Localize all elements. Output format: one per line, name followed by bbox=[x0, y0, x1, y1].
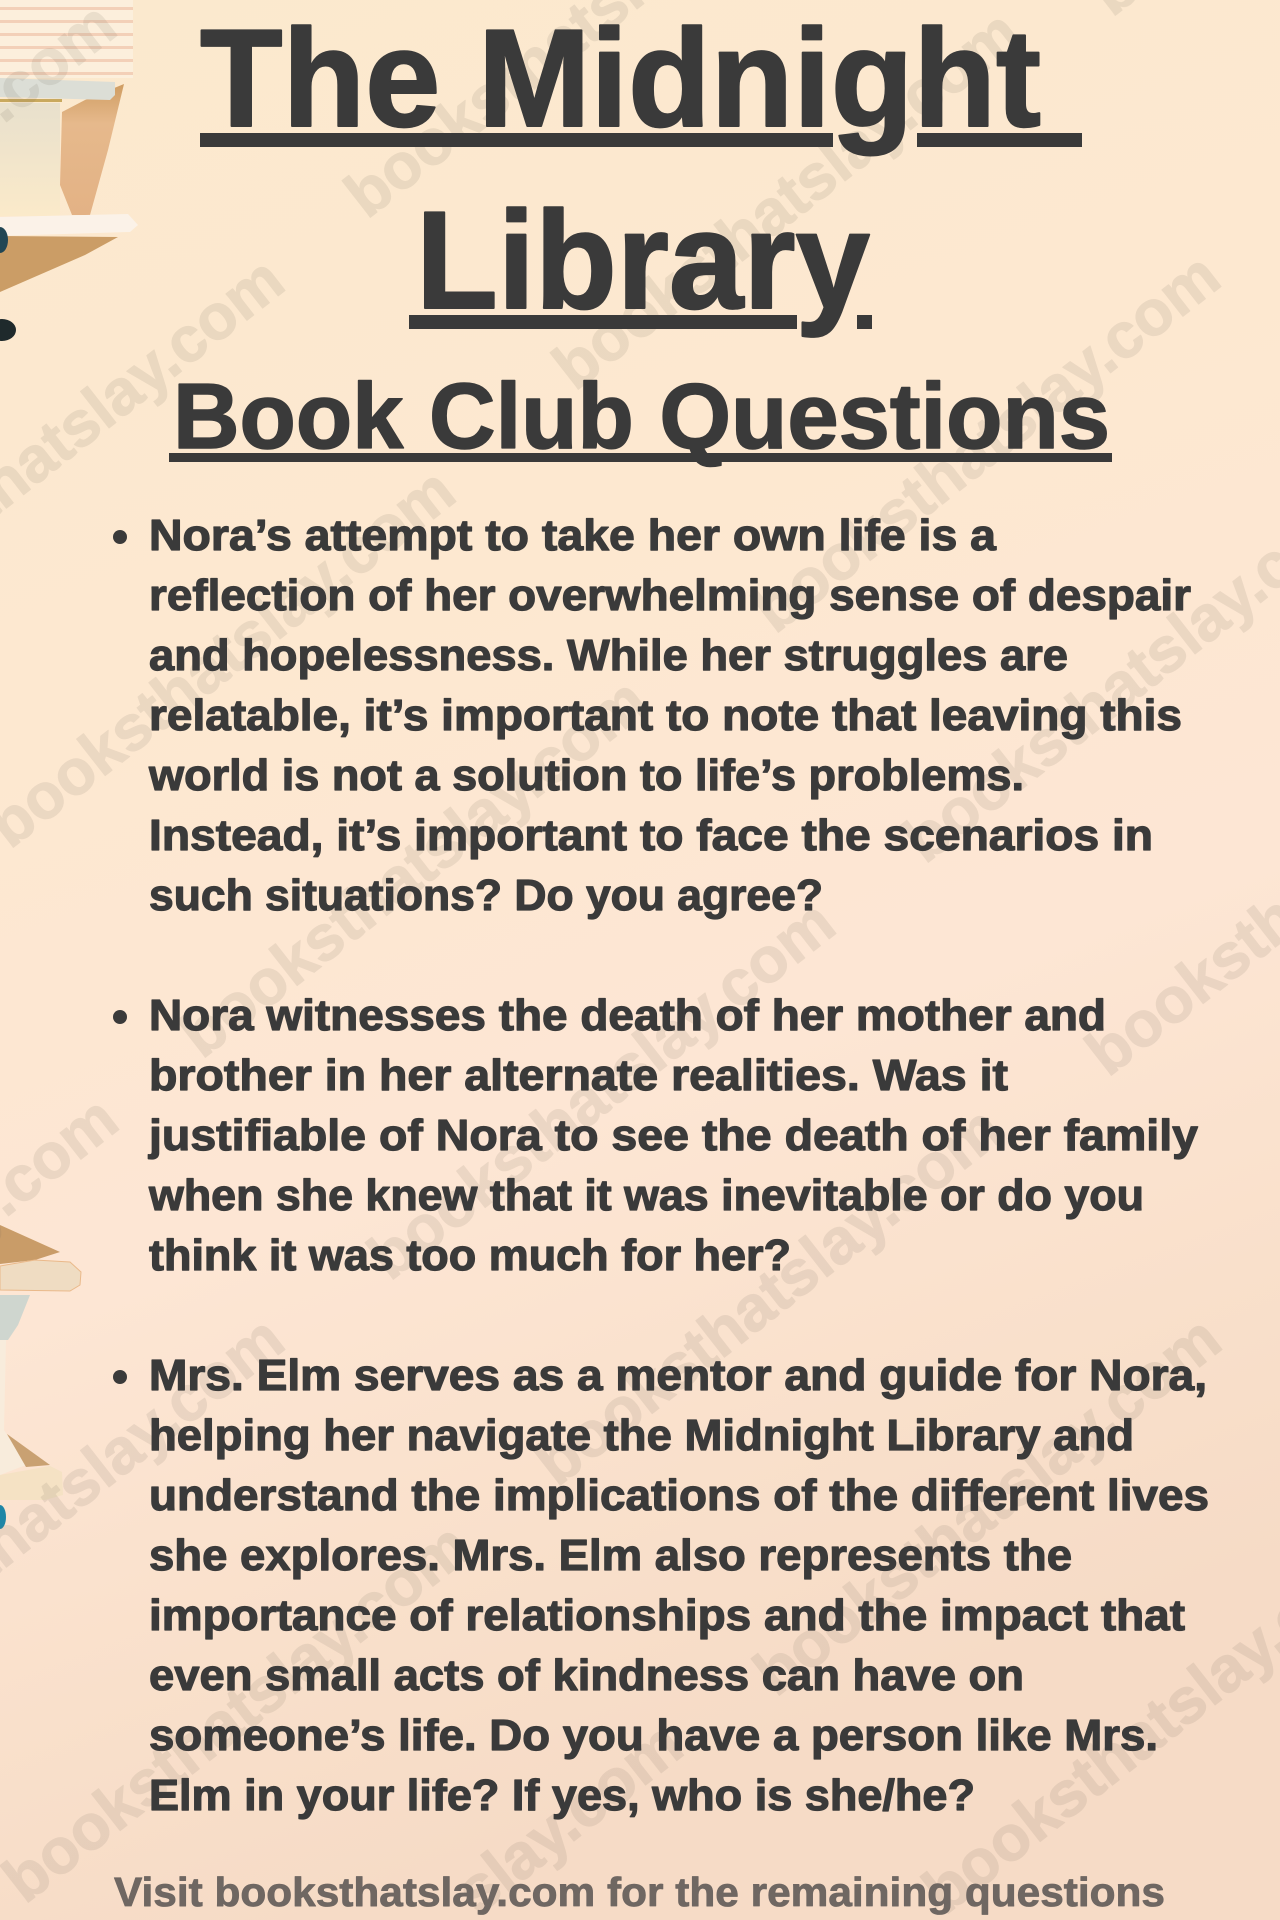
question 1: world is not a solution to life’s problems. bbox=[148, 751, 1024, 800]
watermarks: booksthatslay.com bbox=[354, 885, 848, 1293]
question 1: reflection of her overwhelming sense of despair bbox=[149, 571, 1191, 620]
watermarks: booksthatslay.com bbox=[739, 238, 1233, 646]
watermarks: booksthatslay.com bbox=[539, 0, 1033, 403]
question 1 bbox=[113, 511, 1191, 920]
question 3: understand the implications of the different lives bbox=[149, 1471, 1209, 1520]
question 1: such situations? Do you agree? bbox=[149, 871, 823, 920]
bullet 1 bbox=[113, 530, 127, 544]
question 2 bbox=[113, 991, 1199, 1280]
question 2: when she knew that it was inevitable or do you bbox=[148, 1171, 1144, 1220]
title: Library bbox=[416, 183, 870, 338]
question 1: Instead, it’s important to face the scenarios in bbox=[149, 811, 1153, 860]
watermarks: booksthatslay.com bbox=[740, 1301, 1234, 1709]
question 3: someone’s life. Do you have a person like Mrs. bbox=[149, 1711, 1158, 1760]
question 1: relatable, it’s important to note that leaving this bbox=[149, 691, 1182, 740]
watermarks: booksthatslay.com bbox=[521, 1091, 1015, 1499]
question 3: importance of relationships and the impact that bbox=[149, 1591, 1185, 1640]
question 1: and hopelessness. While her struggles are bbox=[149, 631, 1068, 680]
watermarks: booksthatslay.com bbox=[166, 663, 660, 1071]
question 3: even small acts of kindness can have on bbox=[149, 1651, 1024, 1700]
question 2: think it was too much for her? bbox=[149, 1231, 791, 1280]
title bbox=[200, 1, 1082, 338]
watermarks: booksthatslay.com bbox=[0, 1508, 483, 1916]
question 2: brother in her alternate realities. Was it bbox=[149, 1051, 1008, 1100]
question 2: justifiable of Nora to see the death of her family bbox=[148, 1111, 1199, 1160]
question 2: Nora witnesses the death of her mother and bbox=[149, 991, 1106, 1040]
book stack illustration: middle left bbox=[0, 1225, 81, 1529]
bullet 3 bbox=[113, 1370, 127, 1384]
book stack illustration: top left bbox=[0, 0, 138, 341]
question 3: Elm in your life? If yes, who is she/he? bbox=[149, 1771, 975, 1820]
question 3: Mrs. Elm serves as a mentor and guide for Nora, bbox=[149, 1351, 1207, 1400]
bullet 2 bbox=[113, 1010, 127, 1024]
question 3: helping her navigate the Midnight Library and bbox=[149, 1411, 1134, 1460]
footer call to action: Visit booksthatslay.com for the remaining questions bbox=[114, 1869, 1165, 1915]
question 3: she explores. Mrs. Elm also represents the bbox=[149, 1531, 1072, 1580]
subtitle: Book Club Questions bbox=[173, 364, 1110, 468]
question 3 bbox=[113, 1351, 1209, 1820]
title: The Midnight bbox=[200, 1, 1041, 156]
question 1: Nora’s attempt to take her own life is a bbox=[149, 511, 997, 560]
